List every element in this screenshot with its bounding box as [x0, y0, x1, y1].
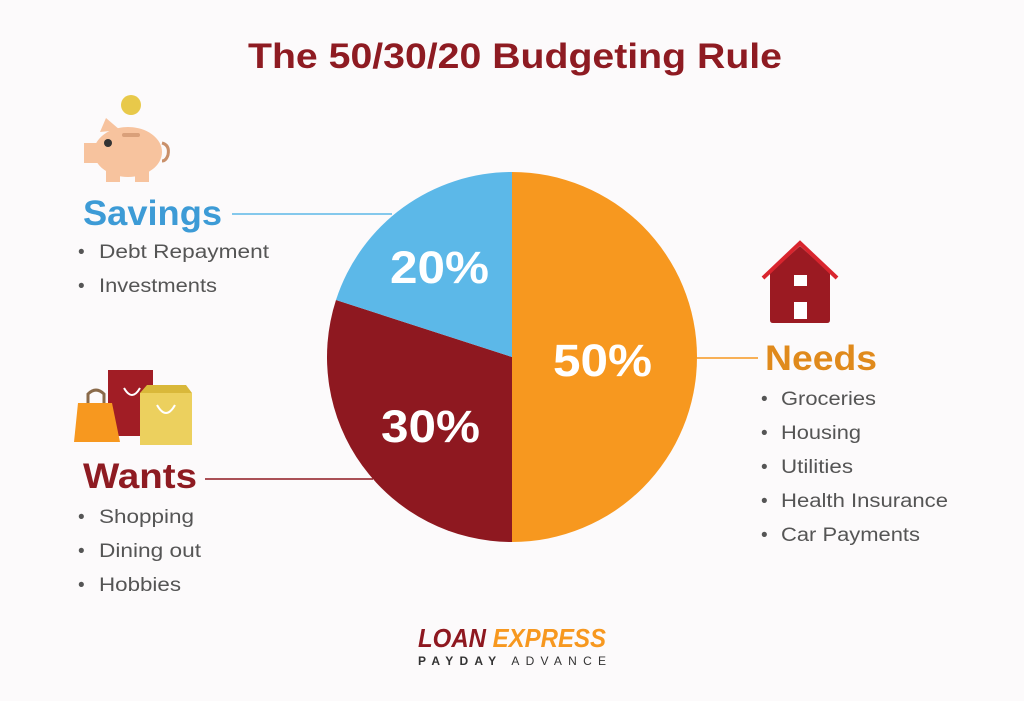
- needs heading: Needs: [765, 339, 877, 378]
- wants connector: [205, 478, 373, 480]
- logo: [418, 623, 607, 668]
- needs list: Car Payments: [781, 525, 920, 546]
- pie chart: 20%: [390, 242, 489, 293]
- wants list: [78, 507, 202, 596]
- needs list: •: [761, 423, 768, 444]
- needs list: •: [761, 457, 768, 478]
- needs list: Housing: [781, 423, 861, 444]
- needs list: Health Insurance: [781, 491, 948, 512]
- logo: LOAN EXPRESS: [418, 623, 607, 653]
- pie chart: 30%: [381, 401, 480, 452]
- needs list: Groceries: [781, 389, 876, 410]
- icon: shopping bags: [74, 370, 192, 445]
- logo: PAYDAY ADVANCE: [418, 654, 606, 668]
- icon: piggy bank: [84, 95, 168, 182]
- wants list: Shopping: [99, 507, 194, 528]
- savings connector: [232, 213, 392, 215]
- needs list: •: [761, 525, 768, 546]
- needs list: [761, 389, 948, 546]
- wants list: •: [78, 541, 85, 562]
- pie chart: [327, 172, 697, 542]
- savings heading: Savings: [83, 194, 222, 233]
- needs list: •: [761, 389, 768, 410]
- wants list: Hobbies: [99, 575, 181, 596]
- wants heading: Wants: [83, 457, 197, 496]
- icon: house: [763, 243, 837, 323]
- savings list: •: [78, 276, 85, 297]
- needs list: Utilities: [781, 457, 853, 478]
- pie chart: 50%: [553, 335, 652, 386]
- savings list: Investments: [99, 276, 217, 297]
- savings list: •: [78, 242, 85, 263]
- title: The 50/30/20 Budgeting Rule: [248, 37, 782, 76]
- wants list: •: [78, 575, 85, 596]
- wants list: •: [78, 507, 85, 528]
- needs list: •: [761, 491, 768, 512]
- wants list: Dining out: [99, 541, 202, 562]
- needs connector: [697, 357, 758, 359]
- savings list: [78, 242, 270, 297]
- savings list: Debt Repayment: [99, 242, 270, 263]
